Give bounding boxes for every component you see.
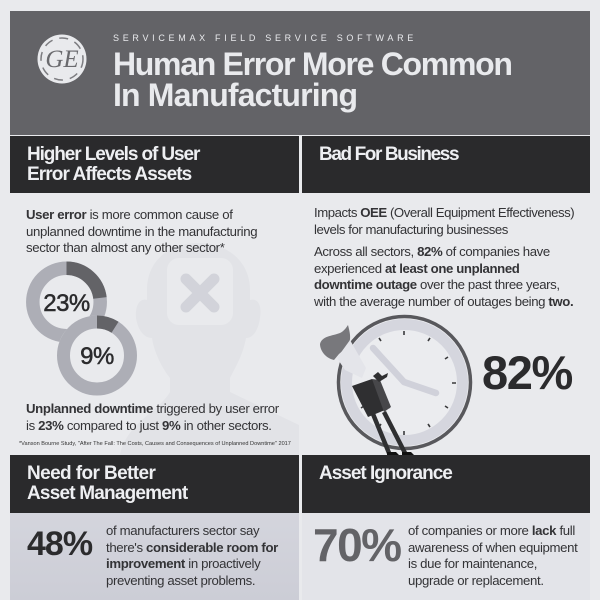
title: In Manufacturing bbox=[113, 77, 357, 113]
text: user error bbox=[26, 207, 257, 255]
footnote: *Vanson Bourne Study, "After The Fall: The Costs, Causes and Consequences of Unplanned Downtime" 2017 bbox=[19, 441, 291, 447]
eyebrow: SERVICEMAX FIELD SERVICE SOFTWARE bbox=[113, 33, 417, 43]
text: OEE bbox=[314, 205, 574, 236]
text: unplanned downtime: Unplanned downtime triggered by user error bbox=[26, 401, 279, 416]
text: unplanned downtime bbox=[26, 401, 279, 432]
text: user error: unplanned downtime in the manufacturing bbox=[26, 224, 257, 238]
panel: 48% bbox=[10, 513, 299, 600]
panel heading: user error bbox=[10, 136, 299, 193]
donut charts: 23% bbox=[43, 290, 90, 317]
panel: 70% bbox=[302, 513, 590, 600]
stat: 48%: 48% bbox=[27, 525, 92, 563]
panel heading: bad for business: Bad For Business bbox=[319, 144, 458, 165]
silhouette with x icon bbox=[180, 274, 220, 312]
text: 48%: improvement in proactively bbox=[106, 556, 260, 571]
stat: 70%: 70% bbox=[313, 519, 401, 571]
text: user error: User error is more common cause of bbox=[26, 207, 233, 222]
text: outages: Across all sectors, 82% of companies have bbox=[314, 244, 550, 259]
text: outages bbox=[314, 244, 573, 308]
title: Human Error More Common bbox=[113, 46, 512, 82]
text: 48% bbox=[106, 523, 278, 588]
donut charts: 9% bbox=[80, 343, 114, 370]
text: 70%: awareness of when equipment bbox=[408, 540, 577, 554]
text: 70%: of companies or more lack full bbox=[408, 523, 575, 538]
text: outages: experienced at least one unplanned bbox=[314, 260, 519, 276]
text: 48%: of manufacturers sector say bbox=[106, 523, 259, 538]
text: 48%: there's considerable room for bbox=[106, 540, 278, 554]
text: 70% bbox=[408, 523, 578, 588]
panel heading: user error: Error Affects Assets bbox=[27, 164, 191, 185]
clock illustration bbox=[320, 314, 472, 455]
panel heading: asset ignorance: Asset Ignorance bbox=[319, 463, 452, 484]
title bbox=[113, 46, 512, 113]
panel heading: asset management: Need for Better bbox=[27, 463, 155, 484]
GE logo bbox=[38, 34, 86, 84]
panel heading: asset management: Asset Management bbox=[27, 483, 187, 504]
text: unplanned downtime: is 23% compared to just 9% in other sectors. bbox=[26, 418, 272, 432]
text: outages: with the average number of outages being two. bbox=[314, 294, 573, 308]
panel heading: user error: Higher Levels of User bbox=[27, 144, 199, 165]
GE logo: GE bbox=[45, 46, 79, 73]
panel heading: asset management bbox=[10, 455, 299, 513]
stat: 82%: 82% bbox=[482, 346, 572, 399]
donut charts bbox=[26, 262, 137, 396]
text: OEE: Impacts OEE (Overall Equipment Effectiveness) bbox=[314, 205, 574, 220]
panel heading: asset ignorance bbox=[302, 455, 590, 513]
text: 48%: preventing asset problems. bbox=[106, 572, 255, 588]
text: OEE: levels for manufacturing businesses bbox=[314, 222, 508, 236]
text: outages: downtime outage over the past three years, bbox=[314, 277, 560, 292]
text: user error: sector than almost any other sector* bbox=[26, 240, 225, 255]
panel heading: bad for business bbox=[302, 136, 590, 193]
text: 70%: is due for maintenance, bbox=[408, 556, 537, 571]
header band bbox=[10, 11, 590, 135]
text: 70%: upgrade or replacement. bbox=[408, 572, 544, 588]
